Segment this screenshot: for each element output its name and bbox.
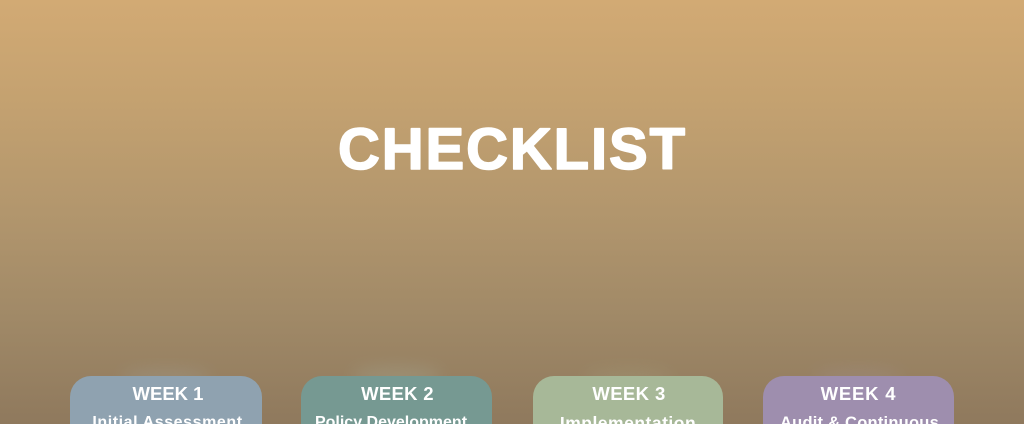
week 3 label: WEEK 3 <box>592 383 666 404</box>
week 1 label: WEEK 1 <box>133 383 203 404</box>
card: week 1 <box>70 376 262 424</box>
title: CHECKLIST <box>338 117 685 182</box>
week 2 label: WEEK 2 <box>361 383 434 404</box>
card: week 4 <box>763 376 954 424</box>
card: week 2 <box>301 376 492 424</box>
card glows <box>121 366 903 387</box>
card: week 3 <box>533 376 723 424</box>
week 4 label: WEEK 4 <box>821 383 896 404</box>
